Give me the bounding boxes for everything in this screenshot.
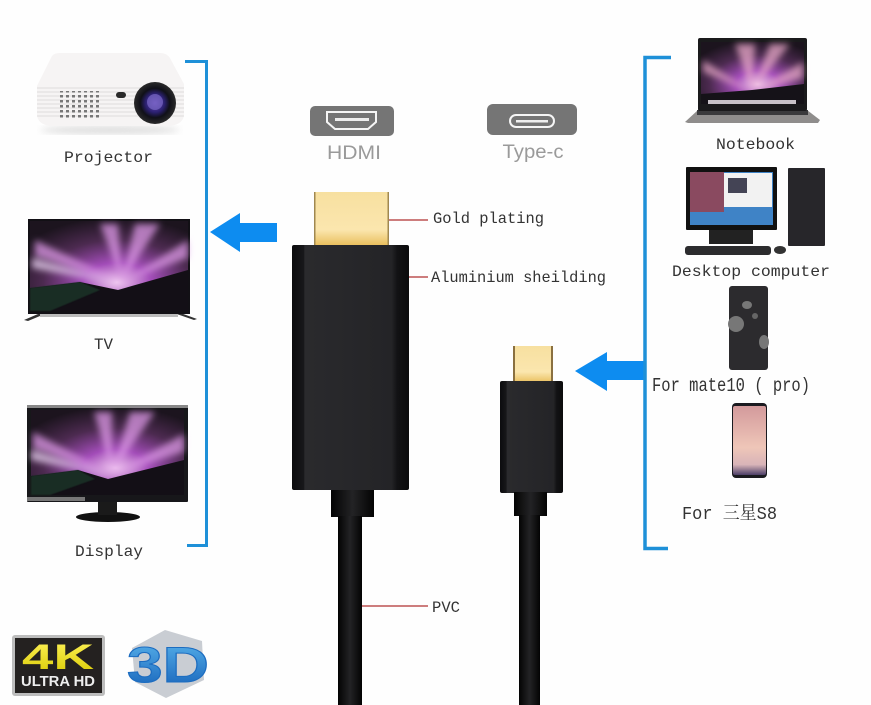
callout: PVC bbox=[362, 599, 460, 617]
label: HDMI: HDMI bbox=[327, 143, 381, 164]
HDMI cable bbox=[292, 192, 409, 705]
icon: Display bbox=[27, 405, 188, 522]
gold plug bbox=[314, 192, 389, 246]
icon: mate10 phone bbox=[728, 286, 769, 370]
badge: Type-c bbox=[487, 104, 577, 135]
badge: 4K Ultra HD bbox=[12, 635, 105, 696]
gold plug bbox=[513, 346, 553, 383]
badge: HDMI bbox=[310, 106, 394, 136]
icon: TV bbox=[24, 219, 197, 321]
callout: PVC: PVC bbox=[432, 599, 460, 617]
label: Display: Display bbox=[75, 543, 143, 561]
aluminium housing bbox=[292, 245, 409, 490]
icon: Notebook bbox=[685, 38, 820, 123]
strain relief bbox=[331, 490, 374, 517]
label: For Samsung S8: For 三星S8 bbox=[682, 503, 777, 525]
PVC cable bbox=[338, 516, 362, 705]
callout: Gold plating: Gold plating bbox=[433, 210, 544, 228]
badge: 4K Ultra HD: ULTRA HD bbox=[21, 673, 95, 690]
right blue bracket bbox=[645, 58, 671, 548]
housing bbox=[500, 381, 563, 493]
label: Notebook: Notebook bbox=[716, 136, 795, 154]
callout: Aluminium sheilding: Aluminium sheilding bbox=[431, 269, 606, 287]
left blue bracket bbox=[185, 62, 206, 546]
label: Projector: Projector bbox=[64, 149, 153, 167]
icon: projector bbox=[37, 53, 184, 134]
label: TV: TV bbox=[94, 336, 113, 354]
badge: 4K Ultra HD: 4K bbox=[22, 638, 94, 677]
badge: 3D: 3D bbox=[127, 637, 209, 693]
arrow: to left devices bbox=[210, 213, 277, 252]
Type-c cable bbox=[500, 346, 563, 705]
badge: 3D bbox=[127, 630, 209, 698]
cable bbox=[519, 515, 540, 705]
label: For mate10 (pro): For mate10 ( pro) bbox=[652, 375, 810, 397]
arrow: from right devices bbox=[575, 352, 646, 391]
icon: Desktop computer bbox=[685, 167, 825, 255]
strain relief bbox=[514, 492, 547, 516]
icon: S8 phone bbox=[732, 403, 767, 478]
label: Desktop computer: Desktop computer bbox=[672, 263, 830, 281]
label: Type-c: Type-c bbox=[502, 142, 564, 163]
